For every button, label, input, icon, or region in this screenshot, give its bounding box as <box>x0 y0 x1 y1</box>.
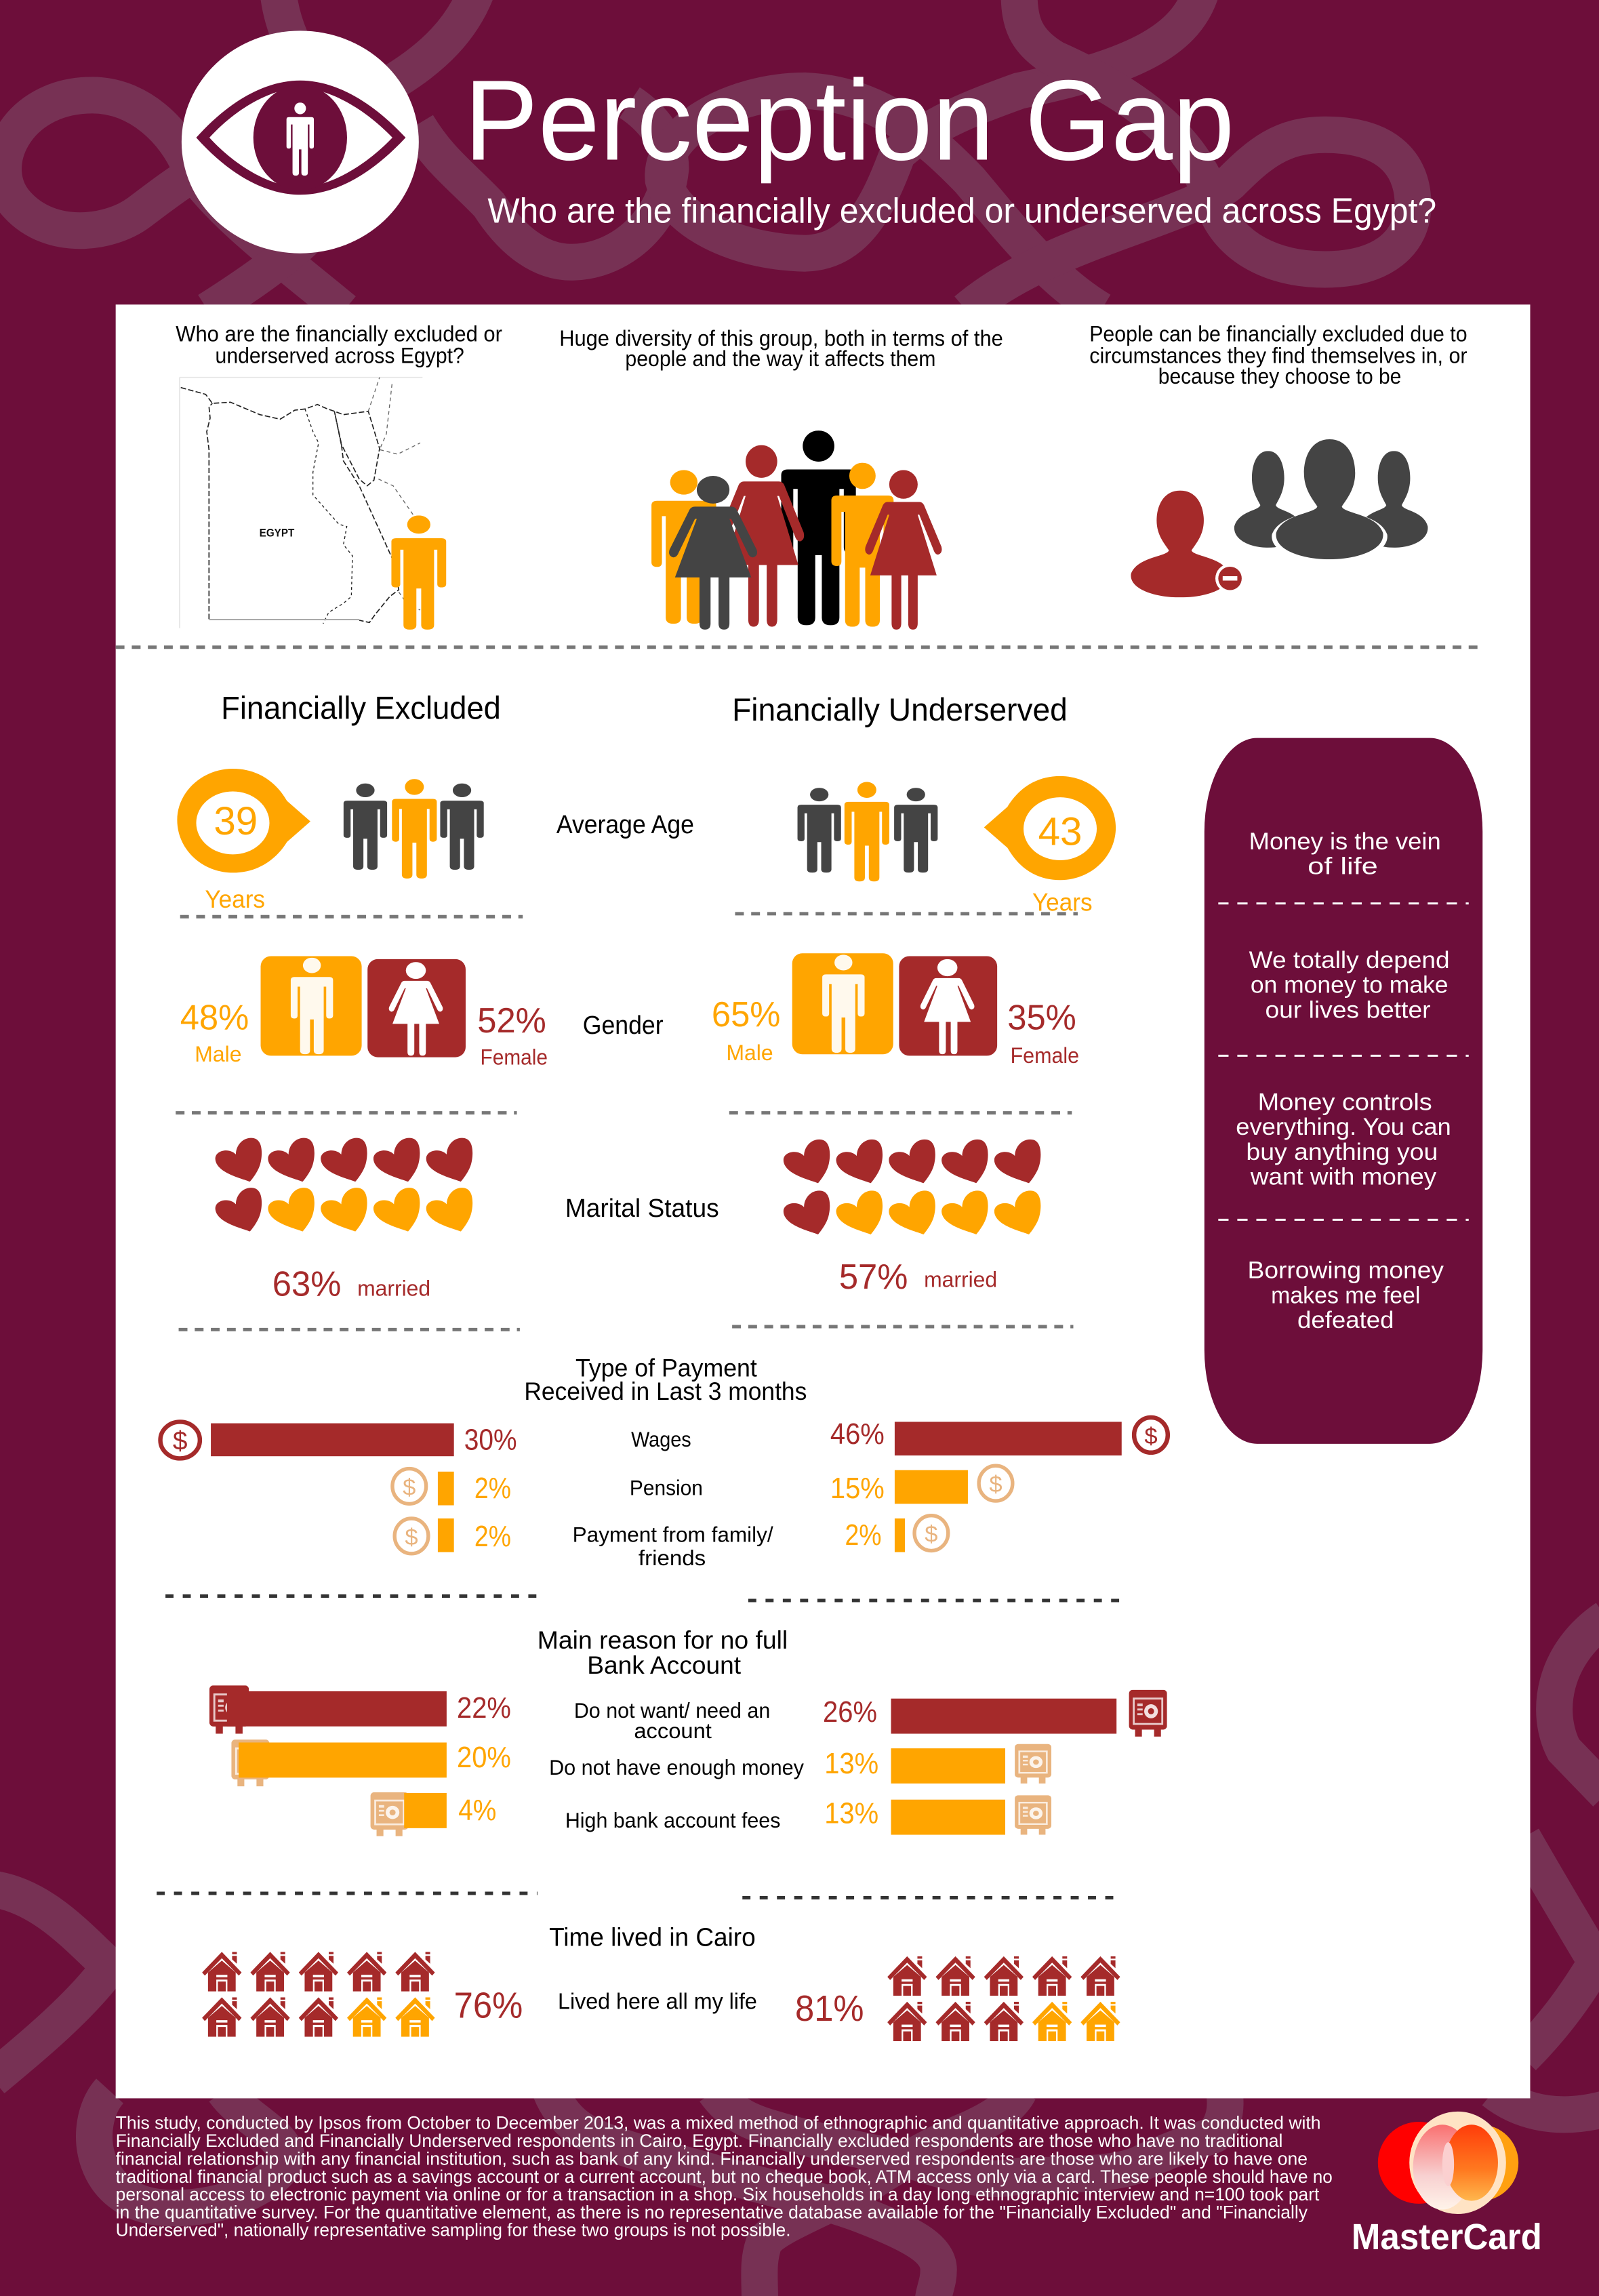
excluded hearts <box>216 1138 472 1232</box>
title: Perception Gap <box>464 56 1234 184</box>
underserved gender values: Female <box>1011 1043 1079 1068</box>
underserved bank values: 13% <box>824 1797 878 1830</box>
bank heading <box>538 1626 788 1679</box>
underserved houses <box>887 1956 1120 2041</box>
underserved gender values: Male <box>726 1041 773 1065</box>
map of Egypt: EGYPT <box>260 526 294 539</box>
column 2 text <box>559 326 1003 371</box>
quote dividers <box>1218 904 1469 1220</box>
bank row labels: account <box>634 1719 712 1743</box>
excluded bank bars <box>227 1691 447 1828</box>
footer methodology text: traditional financial product such as a savings account or a current account, but no cheque book, ATM access only via a card. These people should have no <box>116 2166 1333 2187</box>
heading: financially underserved: Financially Underserved <box>732 692 1068 728</box>
underserved gender values: 35% <box>1007 998 1076 1037</box>
quote 3: buy anything you <box>1246 1138 1438 1165</box>
underserved hearts <box>784 1140 1040 1234</box>
underserved dollar icons: $ <box>989 1472 1003 1497</box>
column 3: circumstances <box>1089 321 1468 597</box>
excluded gender icons <box>261 956 466 1058</box>
underserved married value <box>839 1257 997 1296</box>
icon: grey group and excluded red person <box>1131 437 1428 597</box>
column 1 text: underserved across Egypt? <box>216 344 464 368</box>
marital status row <box>216 1138 1040 1304</box>
excluded payment bars <box>211 1424 454 1552</box>
underserved payment values: 15% <box>830 1472 885 1505</box>
excluded cairo value: 76% <box>454 1986 523 2026</box>
column 2: diversity <box>559 326 1003 630</box>
excluded safes <box>209 1685 409 1836</box>
excluded gender values: Male <box>195 1042 241 1066</box>
quote 2 <box>1249 946 1450 1023</box>
excluded married value: married <box>357 1276 430 1301</box>
underserved gender values: 65% <box>712 994 780 1034</box>
excluded gender values: 52% <box>477 1001 546 1040</box>
gender row <box>180 953 1079 1069</box>
column 3 text: People can be financially excluded due to <box>1089 321 1468 346</box>
underserved bank bars <box>891 1699 1116 1835</box>
underserved bank values: 13% <box>824 1748 878 1780</box>
footer methodology text: personal access to electronic payment via online or for a transaction in a shop. Six households in a day long ethnographic interview and n=100 took part <box>116 2183 1320 2204</box>
column 2 text: Huge diversity of this group, both in terms of the <box>559 326 1003 350</box>
quote 3 <box>1236 1088 1451 1190</box>
heading: financially excluded: Financially Excluded <box>221 691 501 727</box>
payment heading: Type of Payment <box>575 1354 757 1382</box>
excluded bank values: 4% <box>458 1794 496 1827</box>
underserved gender values <box>712 994 1079 1068</box>
underserved gender icons <box>792 953 997 1055</box>
payment row labels: friends <box>639 1546 706 1570</box>
icon: orange man on map <box>391 515 446 630</box>
excluded bank values: 20% <box>457 1741 511 1774</box>
footer methodology text: financial relationship with any financial institution, such as bank of any kind. Financially underserved respondents are those who are likely to have one <box>116 2148 1308 2169</box>
excluded dollar icons: $ <box>403 1474 416 1500</box>
bank row labels: Do not want/ need an <box>574 1699 770 1723</box>
underserved payment values: 46% <box>830 1418 885 1451</box>
excluded dollar icons <box>161 1422 428 1554</box>
excluded payment values <box>464 1424 517 1553</box>
quote 1: of life <box>1308 853 1378 880</box>
column 3 text: because they choose to be <box>1158 364 1401 388</box>
dashed separator lines <box>116 647 1480 1897</box>
bank row labels: High bank account fees <box>565 1809 780 1832</box>
quote 2: We totally depend <box>1249 946 1450 973</box>
underserved safes <box>1015 1690 1167 1835</box>
logo: eye in white circle <box>182 31 419 254</box>
map of Egypt <box>180 378 422 628</box>
underserved payment values: 2% <box>845 1519 881 1552</box>
underserved payment values <box>830 1418 885 1552</box>
quote 3: everything. You can <box>1236 1113 1451 1140</box>
underserved dollar icons <box>914 1417 1168 1551</box>
excluded dollar icons: $ <box>405 1525 418 1550</box>
quote 2: our lives better <box>1265 996 1431 1023</box>
average age row <box>177 769 1116 917</box>
footer methodology text <box>116 2112 1333 2240</box>
column 2 text: people and the way it affects them <box>625 346 935 371</box>
quote 4: makes me feel <box>1271 1281 1420 1308</box>
excluded houses <box>202 1952 435 2037</box>
label: gender: Gender <box>583 1011 664 1040</box>
MasterCard logo <box>1352 2112 1542 2257</box>
white content panel <box>116 304 1530 2098</box>
underserved dollar icons: $ <box>925 1522 938 1548</box>
badge: 43 years: 43 <box>1038 809 1082 853</box>
underserved married value: married <box>924 1268 997 1292</box>
badge: 43 years <box>984 776 1116 917</box>
icon: group of people <box>651 430 942 630</box>
quote 3: want with money <box>1250 1163 1436 1190</box>
excluded payment values: 2% <box>474 1472 511 1505</box>
excluded bank values <box>457 1692 511 1827</box>
badge: 43 years: Years <box>1032 889 1093 917</box>
excluded married value: 63% <box>272 1264 341 1304</box>
quote 2: on money to make <box>1251 971 1448 999</box>
underserved married value: 57% <box>839 1257 908 1296</box>
icon: three men right <box>798 782 937 881</box>
quote 4: Borrowing money <box>1248 1257 1444 1284</box>
bank heading: Main reason for no full <box>538 1626 788 1654</box>
footer methodology text: This study, conducted by Ipsos from October to December 2013, was a mixed method of ethnographic and quantitative approach. It was conducted with <box>116 2112 1321 2133</box>
excluded payment values: 2% <box>474 1520 511 1553</box>
quote 4 <box>1248 1257 1444 1333</box>
excluded payment values: 30% <box>464 1424 517 1456</box>
payment type section <box>161 1354 1168 1570</box>
underserved dollar icons: $ <box>1144 1424 1158 1449</box>
bank heading: Bank Account <box>587 1651 741 1679</box>
footer methodology text: in the quantitative survey. For the quantitative element, as there is no representative database available for the "Financially Excluded" and "Financially <box>116 2202 1308 2223</box>
underserved bank values: 26% <box>823 1696 877 1729</box>
column 1 text <box>176 321 502 368</box>
label: average age: Average Age <box>556 811 694 839</box>
column 1 text: Who are the financially excluded or <box>176 321 502 346</box>
cairo heading: Time lived in Cairo <box>549 1924 756 1952</box>
excluded gender values: Female <box>481 1045 548 1069</box>
bank row labels <box>549 1699 804 1832</box>
bank account section <box>209 1626 1167 1836</box>
icon: three men left <box>344 779 484 879</box>
badge: 39 years: Years <box>205 885 265 913</box>
underserved payment bars <box>895 1422 1122 1552</box>
payment row labels: Pension <box>630 1476 703 1499</box>
excluded married value <box>272 1264 430 1304</box>
badge: 39 years: 39 <box>214 799 258 843</box>
cairo row label: Lived here all my life <box>558 1990 757 2015</box>
quote 4: defeated <box>1297 1306 1394 1333</box>
bank row labels: Do not have enough money <box>549 1756 804 1779</box>
excluded dollar icons: $ <box>173 1426 188 1455</box>
label: marital status: Marital Status <box>565 1194 719 1223</box>
payment row labels: Payment from family/ <box>573 1523 773 1547</box>
time lived in Cairo section <box>202 1924 1120 2041</box>
underserved cairo value: 81% <box>795 1988 864 2029</box>
subtitle: Who are the financially excluded or underserved across Egypt? <box>487 190 1436 230</box>
column 3 text <box>1089 321 1468 388</box>
payment heading: Received in Last 3 months <box>524 1377 807 1405</box>
badge: 39 years <box>177 769 310 913</box>
payment row labels <box>573 1428 773 1570</box>
column 3 text: circumstances they find themselves in, or <box>1089 344 1468 368</box>
panel: quotes <box>1205 738 1482 1444</box>
quote 1 <box>1249 828 1441 880</box>
footer methodology text: Underserved", nationally representative sampling for these two groups is not possible. <box>116 2219 791 2240</box>
column 1: who are the excluded <box>176 321 502 630</box>
payment row labels: Wages <box>631 1428 691 1451</box>
MasterCard wordmark: MasterCard <box>1352 2217 1542 2257</box>
footer methodology text: Financially Excluded and Financially Underserved respondents in Cairo, Egypt. Financially excluded respondents are those who have no traditional <box>116 2130 1282 2151</box>
excluded bank values: 22% <box>457 1692 511 1725</box>
excluded gender values: 48% <box>180 998 249 1037</box>
quote 1: Money is the vein <box>1249 828 1441 855</box>
underserved bank values <box>823 1696 878 1830</box>
quote 3: Money controls <box>1258 1088 1432 1115</box>
excluded gender values <box>180 998 548 1069</box>
payment heading <box>524 1354 807 1405</box>
